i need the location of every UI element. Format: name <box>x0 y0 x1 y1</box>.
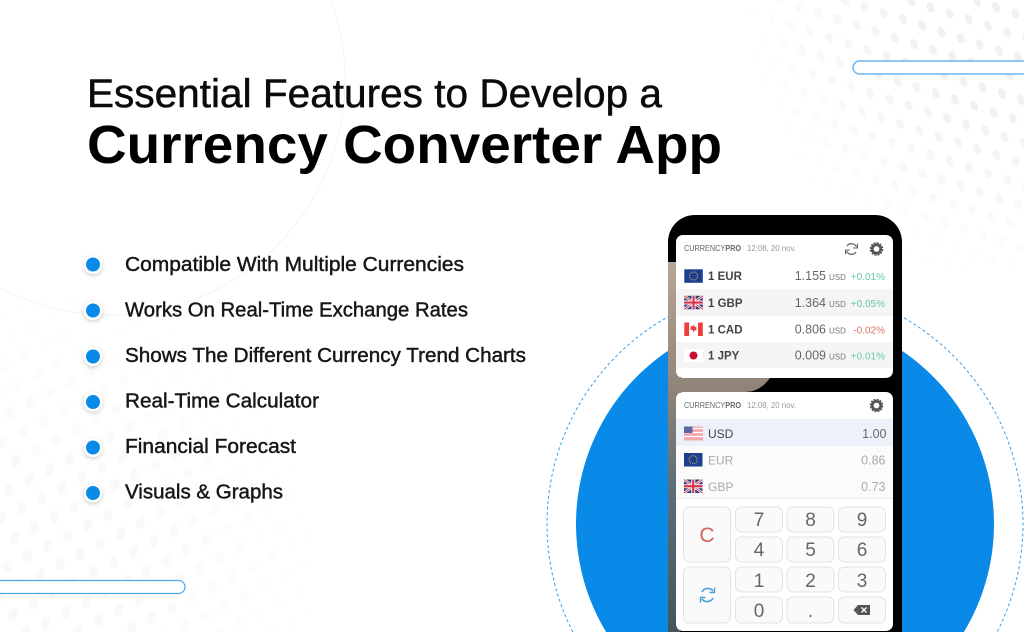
row: EUR: 1 EUR <box>708 271 743 283</box>
feature list <box>84 254 526 504</box>
key: 1: 1 <box>754 571 764 592</box>
row: CAD: -0.02% <box>853 326 885 336</box>
widget header <box>684 243 882 255</box>
title: Essential Features to Develop a <box>87 72 662 116</box>
feature item 4: Real-Time Calculator <box>125 390 319 412</box>
key: 9: 9 <box>857 510 867 531</box>
title: Currency Converter App <box>87 115 722 175</box>
row: GBP: 0.73 <box>861 480 886 494</box>
key: 2: 2 <box>805 571 816 592</box>
title <box>87 72 722 175</box>
key: 9 <box>838 507 886 532</box>
phone <box>668 215 902 632</box>
row: EUR: 1.155 <box>795 269 826 283</box>
row: GBP: USD <box>829 300 846 309</box>
row: EUR: USD <box>829 273 846 282</box>
phone body <box>668 215 902 632</box>
key: 3: 3 <box>857 571 867 592</box>
dashed circle outline <box>547 286 1023 632</box>
row: GBP <box>684 296 885 310</box>
key: clear: C <box>699 524 715 547</box>
key: 7 <box>736 507 782 532</box>
widget header <box>684 400 882 412</box>
row: EUR: 0.86 <box>861 454 886 468</box>
key: refresh <box>684 567 730 623</box>
key: 2 <box>787 567 834 592</box>
row: JPY: USD <box>829 352 846 362</box>
feature item 5: Financial Forecast <box>125 436 296 458</box>
key: backspace <box>838 597 886 623</box>
widget: calculator <box>676 392 893 631</box>
background: dot pattern top right <box>840 0 1024 182</box>
row: CAD: 0.806 <box>795 322 826 336</box>
widget header: 12:08, 20 nov. <box>747 244 796 253</box>
row: GBP <box>684 480 886 494</box>
feature item 1: Compatible With Multiple Currencies <box>125 254 464 276</box>
row: CAD: USD <box>829 326 846 336</box>
feature item 6: Visuals & Graphs <box>125 482 283 504</box>
row: EUR <box>684 269 885 283</box>
row: JPY <box>684 348 885 362</box>
key: 4 <box>736 537 782 562</box>
blue circle behind phone <box>576 315 994 632</box>
row: EUR: EUR <box>708 454 734 468</box>
key: 5 <box>787 537 834 562</box>
row: JPY: 0.009 <box>795 348 826 362</box>
key: clear <box>684 507 730 562</box>
key: 5: 5 <box>805 540 816 561</box>
row: EUR: +0.01% <box>851 272 885 283</box>
key: 7: 7 <box>754 510 764 531</box>
row: GBP: 1.364 <box>795 296 826 310</box>
keypad <box>684 507 886 623</box>
key: 0: 0 <box>754 601 764 622</box>
wallpaper photo <box>668 262 770 632</box>
key: dot: . <box>808 601 813 622</box>
row: EUR <box>676 446 893 498</box>
key: dot <box>787 597 834 623</box>
key: 8 <box>787 507 834 532</box>
decorative pill bottom left <box>0 580 185 594</box>
decorative pill top right <box>853 61 1024 74</box>
row: JPY: 1 JPY <box>708 350 740 362</box>
row: CAD <box>684 322 885 336</box>
row: GBP: GBP <box>708 480 733 494</box>
row: USD <box>676 419 893 446</box>
key: 8: 8 <box>805 510 816 531</box>
row: GBP: +0.05% <box>851 299 885 310</box>
feature item 2: Works On Real-Time Exchange Rates <box>125 300 468 322</box>
key: 6: 6 <box>857 540 867 561</box>
widget: exchange rates <box>676 235 893 378</box>
widget header: CURRENCYPRO <box>684 401 741 410</box>
row: CAD: 1 CAD <box>708 324 743 336</box>
row: JPY: +0.01% <box>851 352 885 362</box>
key: 1 <box>736 567 782 592</box>
widget header: 12:08, 20 nov. <box>747 401 796 410</box>
background: faint circle outline <box>0 0 345 315</box>
row: GBP: 1 GBP <box>708 298 743 310</box>
key: 0 <box>736 597 782 623</box>
row: USD: USD <box>708 427 734 441</box>
background: dot pattern bottom left <box>0 270 340 632</box>
feature item 3: Shows The Different Currency Trend Charts <box>125 345 526 367</box>
key: 3 <box>838 567 886 592</box>
key: 6 <box>838 537 886 562</box>
key: 4: 4 <box>754 540 765 561</box>
row: USD: 1.00 <box>862 427 887 441</box>
widget header: CURRENCYPRO <box>684 244 741 253</box>
